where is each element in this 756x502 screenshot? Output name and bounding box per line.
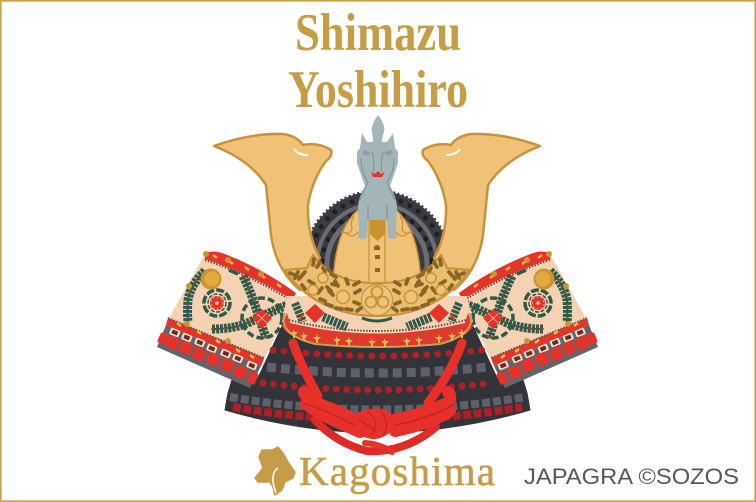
- place name: Kagoshima: [299, 448, 495, 494]
- row of grey squares: [230, 397, 525, 410]
- title: Yoshihiro: [288, 61, 468, 119]
- sode left shoulder guard: [157, 251, 296, 388]
- helmet scroll ornaments: [343, 216, 411, 236]
- icon: family crest: [362, 284, 392, 316]
- knot: [356, 410, 393, 438]
- title: Shimazu: [295, 4, 461, 62]
- red cords: [293, 343, 462, 452]
- right antler: [423, 134, 540, 290]
- row of red dots: [263, 383, 492, 390]
- left bundle: [304, 392, 365, 432]
- title: [288, 4, 468, 119]
- left antler: [214, 134, 331, 290]
- helmet centre column: [369, 210, 385, 285]
- icon: helmet bowl: [304, 191, 450, 337]
- icon: fox: [357, 115, 398, 239]
- helmet gold dome: [333, 204, 421, 285]
- shikoro neck guard: [225, 322, 530, 433]
- icon: Kagoshima map: [255, 447, 295, 495]
- sode right shoulder guard: [459, 251, 598, 388]
- right strap: [428, 343, 462, 403]
- crescent with leaf pattern: [285, 255, 469, 316]
- right bundle: [393, 392, 450, 431]
- row of red dots: [273, 350, 482, 356]
- left strap: [293, 343, 318, 396]
- row of grey squares: [267, 367, 488, 373]
- crescent maedate and antlers: [214, 134, 540, 316]
- row of red squares: [233, 407, 522, 420]
- visor band: [282, 296, 473, 347]
- lower loop: [315, 420, 436, 451]
- credit: JAPAGRA ©SOZOS: [524, 464, 739, 489]
